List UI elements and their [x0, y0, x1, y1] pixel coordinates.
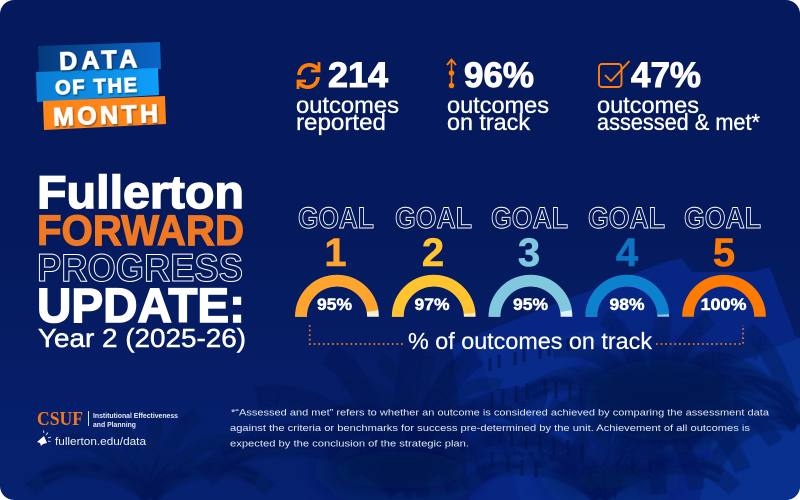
stat: 96% outcomes on track: on track [447, 109, 530, 135]
footnote: against the criteria or benchmarks for success pre-determined by the unit. Achievement of all outcomes is [230, 423, 750, 434]
goal 2 gauge: 2 [422, 231, 444, 275]
stat: 214 outcomes reported: reported [296, 109, 386, 135]
title: Fullerton Forward Progress Update: UPDATE: [37, 280, 245, 333]
stat: 96% outcomes on track: 96% [464, 56, 534, 95]
stat: 47% outcomes assessed and met [597, 56, 760, 135]
goal 3 gauge: 95% [513, 295, 548, 314]
goal 5 gauge: 100% [700, 295, 746, 314]
icon: click cursor [37, 430, 51, 446]
goal 3 gauge: 3 [518, 231, 540, 275]
title: Fullerton Forward Progress Update: Year 2 (2025-26) [38, 323, 246, 353]
footnote [230, 408, 770, 450]
icon: checkbox [599, 61, 630, 87]
title: Fullerton Forward Progress Update [37, 166, 246, 353]
badge: data of the month [36, 42, 166, 132]
goal 1 gauge: 95% [317, 295, 352, 314]
badge: data of the month: OF THE [55, 75, 137, 100]
icon: up arrow with milestones [447, 60, 456, 88]
stat: 96% outcomes on track [447, 56, 549, 135]
goal 4 gauge [588, 202, 665, 317]
goal 5 gauge [684, 202, 761, 317]
goal 3 gauge: GOAL [491, 202, 568, 235]
website link: fullerton.edu/data [55, 436, 147, 448]
goal 3 gauge [491, 202, 568, 317]
title: Fullerton Forward Progress Update: FORWARD [37, 207, 244, 255]
stat: 47% outcomes assessed and met: outcomes [597, 92, 699, 118]
goal 5 gauge: GOAL [684, 202, 761, 235]
icon: refresh arrows [298, 62, 319, 89]
goal 5 gauge: 5 [713, 231, 735, 275]
goal 1 gauge [298, 202, 374, 317]
title: Fullerton Forward Progress Update: PROGRESS [37, 247, 243, 290]
logo: CSUF Institutional Effectiveness and Planning [37, 408, 178, 430]
goal 1 gauge: GOAL [298, 202, 374, 235]
title: Fullerton Forward Progress Update: Fullerton [37, 166, 244, 218]
goal 4 gauge: GOAL [588, 202, 665, 235]
goal 2 gauge: GOAL [395, 202, 472, 235]
building photo [452, 258, 800, 500]
palm trees [30, 313, 797, 498]
badge: data of the month: DATA [59, 45, 138, 76]
goal 2 gauge: 97% [414, 295, 450, 314]
footnote: *“Assessed and met” refers to whether an outcome is considered achieved by comparing the assessment data [231, 408, 770, 418]
goal 4 gauge: 98% [610, 295, 644, 314]
badge: data of the month: MONTH [53, 100, 159, 132]
goal 4 gauge: 4 [616, 231, 639, 275]
stat: 214 outcomes reported: 214 [328, 56, 389, 95]
goal 2 gauge [395, 202, 472, 317]
goal 1 gauge: 1 [324, 231, 347, 275]
stat: 96% outcomes on track: outcomes [447, 92, 549, 118]
stat: 47% outcomes assessed and met: assessed & met* [597, 109, 760, 135]
website link [37, 430, 147, 448]
bracket caption: % of outcomes on track [310, 325, 743, 354]
stat: 214 outcomes reported [296, 56, 399, 135]
footnote: expected by the conclusion of the strategic plan. [230, 438, 469, 450]
logo: CSUF Institutional Effectiveness and Planning: and Planning [93, 422, 136, 429]
logo: CSUF Institutional Effectiveness and Planning: CSUF [37, 408, 83, 430]
bracket caption: % of outcomes on track: % of outcomes on track [408, 328, 652, 354]
stat: 47% outcomes assessed and met: 47% [631, 56, 701, 95]
logo: CSUF Institutional Effectiveness and Planning: Institutional Effectiveness [93, 413, 178, 420]
stat: 214 outcomes reported: outcomes [296, 92, 399, 118]
